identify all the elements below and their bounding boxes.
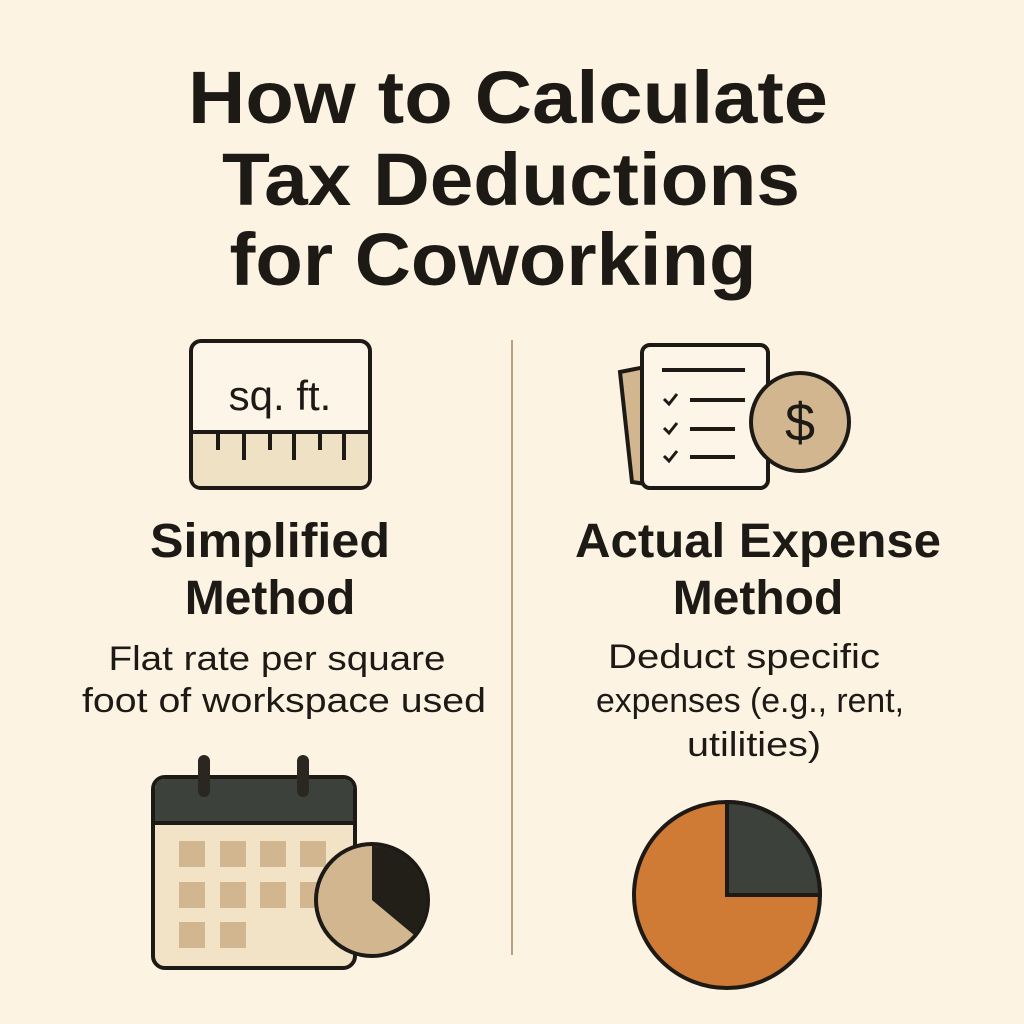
icon: sq ft ruler: sq. ft. bbox=[229, 372, 331, 419]
title: for Coworking bbox=[230, 218, 756, 301]
icon: document with dollar coin bbox=[620, 345, 849, 488]
heading: actual expense method: Actual Expense bbox=[575, 515, 941, 568]
text: simplified description: Flat rate per square bbox=[108, 640, 446, 678]
heading: simplified method: Simplified bbox=[150, 515, 390, 568]
text: actual description: utilities) bbox=[687, 726, 821, 764]
title: How to Calculate bbox=[188, 56, 828, 139]
title bbox=[188, 56, 828, 301]
text: actual description bbox=[596, 638, 904, 764]
heading: actual expense method: Method bbox=[673, 572, 843, 625]
text: simplified description: foot of workspace used bbox=[82, 682, 486, 720]
text: actual description: Deduct specific bbox=[608, 638, 880, 676]
divider bbox=[511, 340, 513, 955]
icon: sq ft ruler bbox=[191, 341, 370, 488]
text: actual description: expenses (e.g., rent, bbox=[596, 682, 904, 720]
text: simplified description bbox=[82, 640, 486, 720]
icon: document with dollar coin: $ bbox=[785, 393, 815, 453]
pie chart bbox=[634, 802, 820, 988]
heading: simplified method: Method bbox=[185, 572, 355, 625]
icon: calendar with pie bbox=[153, 755, 428, 968]
title: Tax Deductions bbox=[222, 138, 800, 221]
heading: simplified method bbox=[150, 515, 390, 625]
heading: actual expense method bbox=[575, 515, 941, 625]
